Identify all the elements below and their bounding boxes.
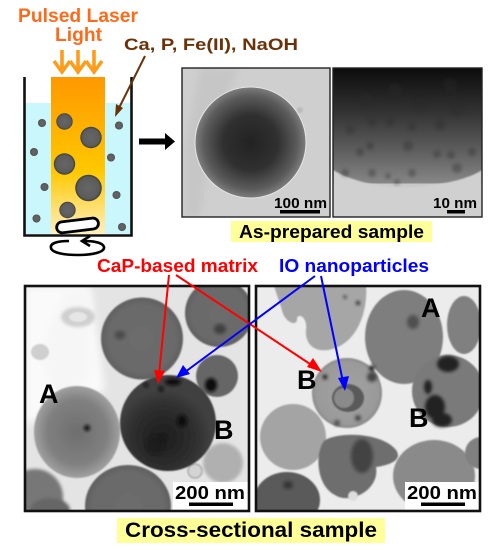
stirring rotation arrow [51, 236, 104, 255]
panel: TEM 10 nm [333, 68, 482, 217]
arrows: CaP-based matrix pointers [154, 275, 322, 384]
title: pulsed laser light: Pulsed Laser [18, 6, 139, 27]
label: B upper: B [297, 365, 316, 395]
stir bar [56, 217, 99, 233]
beaker walls [24, 77, 132, 236]
laser beam [51, 77, 105, 234]
label: A: A [421, 293, 440, 323]
scale bar: 200 nm: 200 nm [175, 482, 245, 503]
crescent particle [274, 286, 366, 350]
label: A: A [39, 379, 58, 409]
particle A [34, 386, 120, 478]
label: IO nanoparticles: IO nanoparticles [279, 256, 429, 276]
label: B: B [214, 415, 234, 445]
panel: cross-section left [24, 284, 250, 512]
diagram: beaker with laser beam [24, 77, 132, 255]
title: pulsed laser light: Light [55, 25, 103, 46]
title: pulsed laser light [18, 6, 139, 46]
arrow: process [139, 133, 175, 150]
caption: as-prepared sample: As-prepared sample [239, 221, 424, 242]
water [25, 103, 131, 234]
arrow: reagents pointer [115, 56, 145, 117]
panel: TEM 100 nm [182, 68, 330, 217]
arrows: IO nanoparticles pointers [176, 276, 349, 391]
icon: laser arrows [54, 50, 102, 72]
particle B with core [312, 358, 382, 428]
particle B [120, 375, 216, 471]
label: B lower: B [409, 403, 428, 433]
label: reagents: Ca, P, Fe(II), NaOH [124, 35, 298, 54]
caption: cross-sectional sample: Cross-sectional sample [125, 519, 377, 542]
label: CaP-based matrix: CaP-based matrix [97, 256, 258, 276]
particles in solution [30, 119, 126, 231]
scale bar: 200 nm: 200 nm [407, 482, 477, 503]
scale bar: 100 nm: 100 nm [274, 195, 327, 212]
scale bar: 10 nm: 10 nm [433, 195, 477, 212]
panel: cross-section right [254, 284, 482, 512]
nanoparticles in beam [54, 113, 102, 218]
